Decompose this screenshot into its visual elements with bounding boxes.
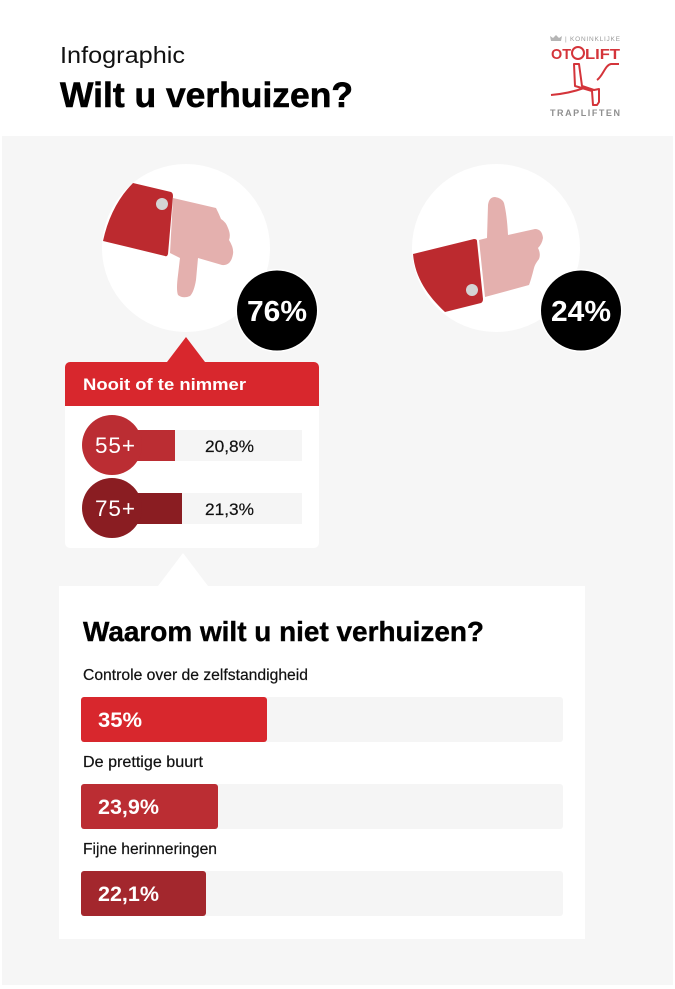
logo: Otolift trapliften: TRAPLIFTEN	[550, 108, 620, 118]
logo: Otolift trapliften	[550, 35, 621, 118]
row: 55+	[82, 415, 302, 475]
bar: Controle over de zelfstandigheid: Controle over de zelfstandigheid	[83, 667, 308, 684]
header title: Wilt u verhuizen?	[60, 76, 353, 115]
badge: 24%: 24%	[551, 296, 611, 328]
bar: Fijne herinneringen: Fijne herinneringen	[83, 841, 217, 858]
row: 55+: 20,8%	[205, 437, 254, 456]
heading: Waarom wilt u niet verhuizen?	[83, 616, 484, 647]
logo: Otolift trapliften: OT	[551, 46, 571, 63]
header title: Infographic	[60, 42, 185, 68]
logo: Otolift trapliften: LIFT	[585, 46, 620, 63]
thumbs up group	[412, 164, 622, 352]
logo: Otolift trapliften: | KONINKLIJKE	[565, 36, 621, 43]
icon: cuff button	[156, 198, 168, 210]
white circle	[412, 164, 580, 332]
bar: De prettige buurt	[81, 754, 563, 829]
badge: 76%	[236, 269, 318, 352]
header title	[60, 42, 353, 115]
icon: hand thumbs up	[479, 197, 543, 297]
badge: 24%	[540, 269, 622, 352]
bar: Controle over de zelfstandigheid: 35%	[98, 709, 142, 732]
row: 75+: 21,3%	[205, 500, 254, 519]
icon: red cuff	[103, 183, 173, 256]
bar: Fijne herinneringen	[81, 841, 563, 916]
bar: Controle over de zelfstandigheid	[81, 667, 563, 742]
row: 75+: 75+	[95, 496, 135, 521]
panel: Waarom wilt u niet verhuizen	[59, 553, 585, 939]
bar: De prettige buurt: De prettige buurt	[83, 754, 204, 771]
badge: 76%: 76%	[247, 296, 307, 328]
row: 75+	[82, 478, 302, 538]
row: 55+: 55+	[95, 433, 135, 458]
panel: Nooit of te nimmer	[65, 337, 319, 548]
thumbs down group	[102, 164, 318, 352]
card body	[65, 362, 319, 548]
white circle	[102, 164, 270, 332]
heading: Nooit of te nimmer	[83, 375, 246, 394]
bar: Fijne herinneringen: 22,1%	[98, 883, 159, 906]
icon: hand thumbs down	[170, 198, 233, 297]
card header with pointer	[65, 337, 319, 406]
icon: red cuff	[413, 239, 483, 312]
panel body with pointer	[59, 553, 585, 939]
bar: De prettige buurt: 23,9%	[98, 796, 159, 819]
icon: cuff button	[466, 284, 478, 296]
